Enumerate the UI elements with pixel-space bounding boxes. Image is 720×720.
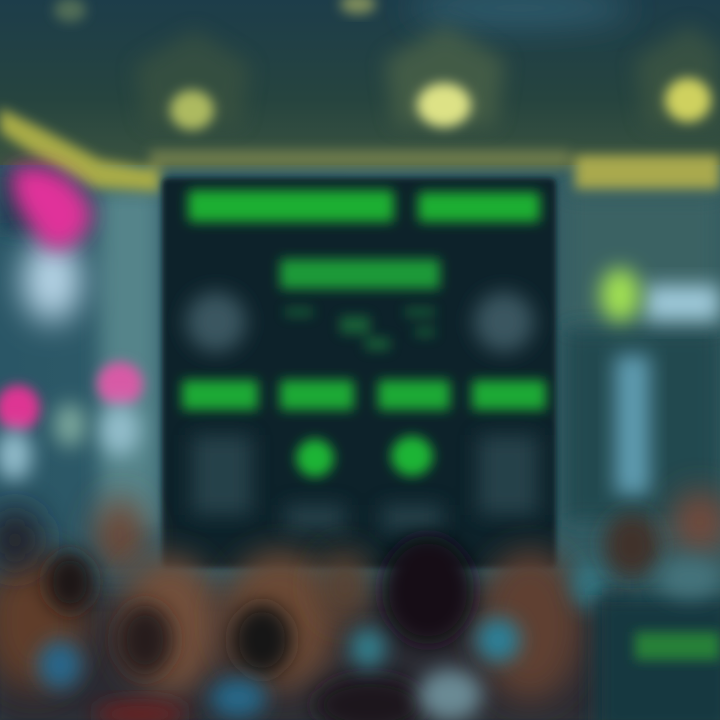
crowd silhouettes	[0, 497, 620, 720]
center chart marks	[285, 308, 435, 350]
scoreboard panel	[162, 178, 556, 568]
column header bars	[182, 380, 546, 410]
ceiling lamps	[54, 0, 720, 130]
grey table columns	[192, 435, 538, 530]
header bars	[188, 190, 540, 222]
yellow ceiling trim	[0, 108, 720, 192]
subtitle bar	[280, 259, 440, 289]
right side crowd	[595, 490, 720, 720]
grey side blocks	[186, 292, 534, 352]
right wall light	[600, 268, 720, 322]
green dots	[296, 436, 433, 477]
ceiling	[0, 0, 720, 165]
left wall lights	[0, 166, 143, 481]
